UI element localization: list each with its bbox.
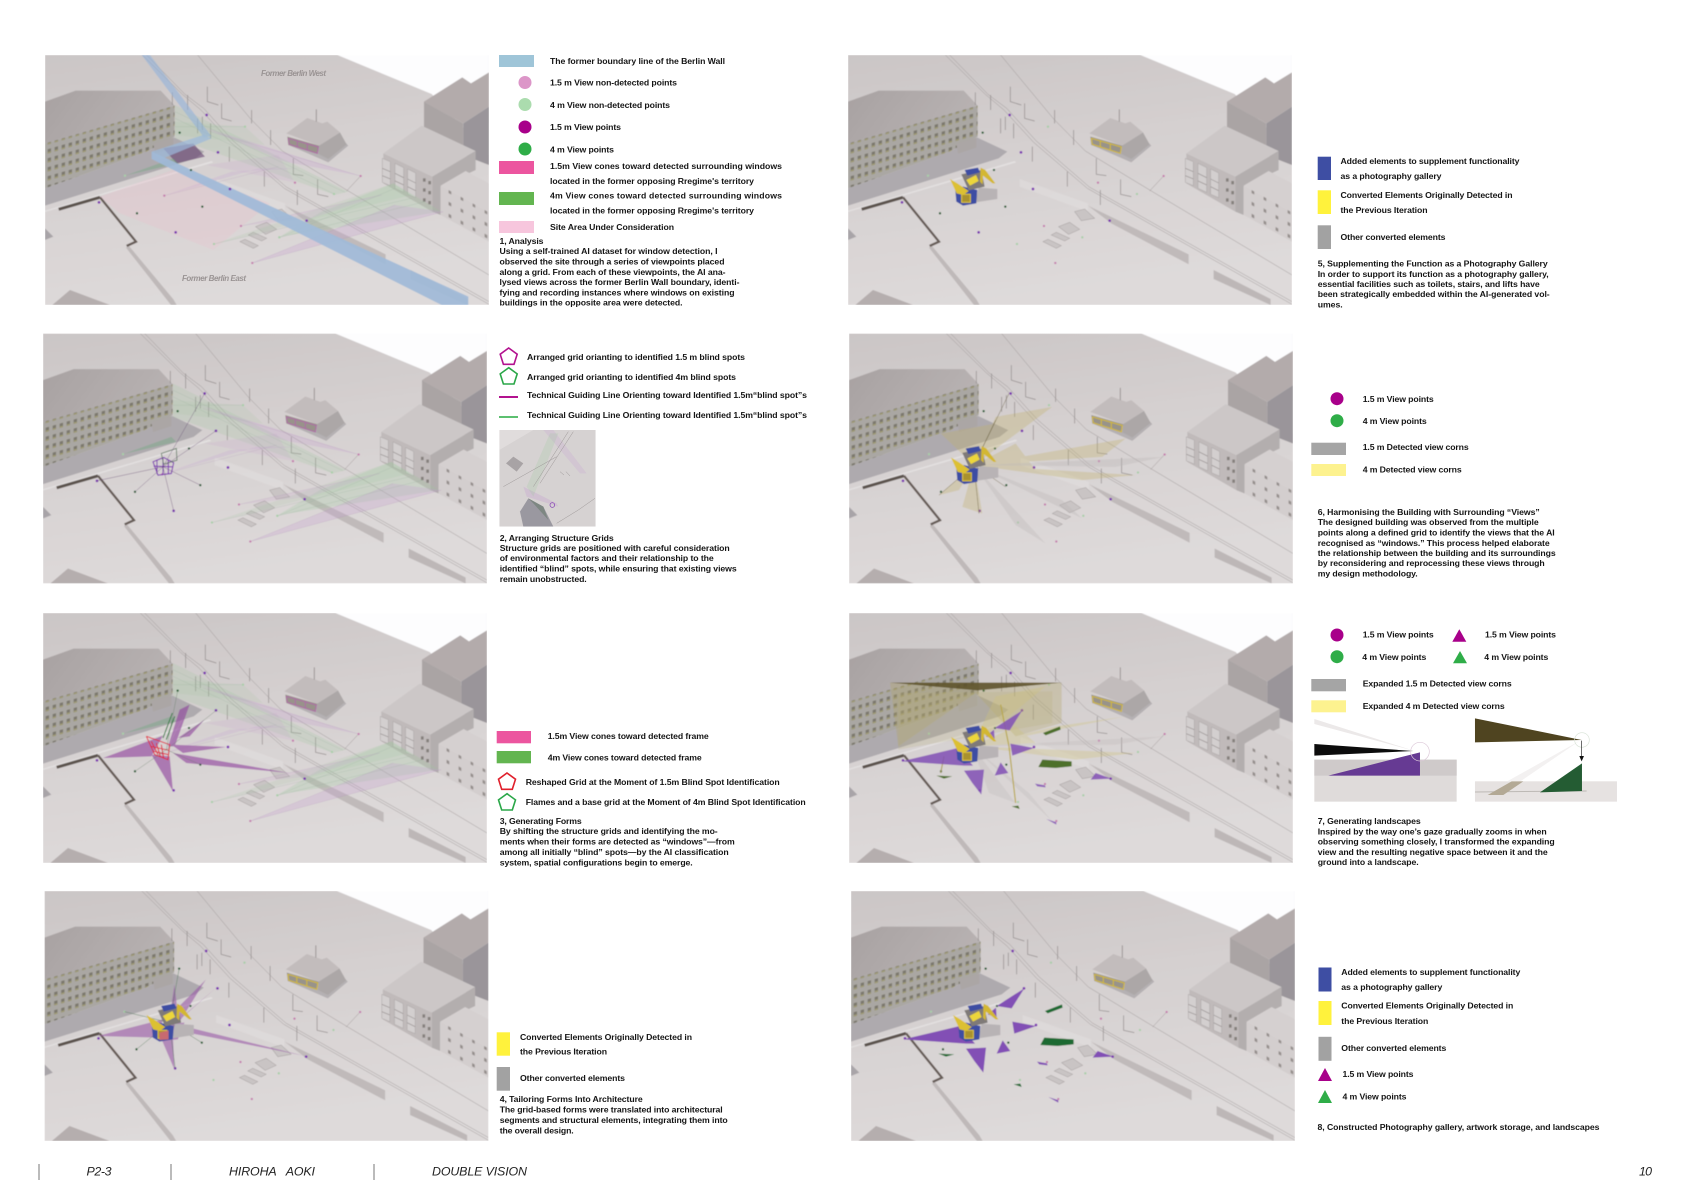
text: 7 generating landscapes description <box>1318 816 1555 867</box>
legend: 6 detected view cones: 4 m Detected view corns <box>1363 464 1462 474</box>
legend: 7 view points and expanded cones: 4 m View points <box>1362 652 1426 662</box>
legend: 1 analysis: 4 m View non-detected points <box>550 100 670 110</box>
text: 2 arranging structure grids description: identified “blind” spots, while ensuring that existing views <box>500 564 737 574</box>
text: 1 analysis description <box>500 236 740 308</box>
legend: 5 functional elements <box>1318 156 1520 249</box>
text: 3 generating forms description <box>500 816 735 868</box>
legend: 8 constructed elements: the Previous Iteration <box>1341 1016 1428 1026</box>
panel: 7 generating landscapes site view <box>849 613 1293 863</box>
legend: 5 functional elements: Other converted elements <box>1340 232 1446 242</box>
text: 3 generating forms description: system, spatial configurations begin to emerge. <box>500 858 693 868</box>
legend: 5 functional elements: the Previous Iteration <box>1340 205 1428 215</box>
text: 6 harmonising description: points along a defined grid to identify the views that the AI <box>1318 528 1555 538</box>
legend: 8 constructed elements <box>1318 967 1520 1103</box>
text: 5 supplementing function description: umes. <box>1318 300 1343 310</box>
footer: HIROHA AOKI <box>229 1164 316 1178</box>
text: 2 arranging structure grids description: remain unobstructed. <box>500 574 587 584</box>
legend: 6 detected view cones: 4 m View points <box>1363 416 1427 426</box>
legend: 7 view points and expanded cones: 1.5 m View points <box>1485 630 1556 640</box>
legend: 4 converted elements: Other converted elements <box>520 1073 625 1083</box>
legend: 8 constructed elements: as a photography gallery <box>1341 982 1442 992</box>
legend: 4 converted elements <box>497 1032 692 1091</box>
panel: 1 analysis site view <box>45 55 489 305</box>
text: 4 tailoring forms description: the overall design. <box>500 1126 574 1136</box>
legend: 1 analysis: located in the former opposing Rregime's territory <box>550 206 754 216</box>
panel: 2 arranging structure grids site view <box>43 334 487 583</box>
text: 4 tailoring forms description: The grid-based forms were translated into architectural <box>500 1104 723 1114</box>
panel: 5 supplementing function site view <box>848 55 1292 305</box>
legend: 6 detected view cones <box>1311 392 1469 476</box>
legend: 8 constructed elements: 4 m View points <box>1342 1092 1407 1102</box>
text: 7 generating landscapes description: observing something closely, I transformed the expanding <box>1318 836 1555 846</box>
text: 6 harmonising description: my design methodology. <box>1318 568 1418 578</box>
legend: 8 constructed elements: Other converted elements <box>1341 1043 1446 1053</box>
text: 3 generating forms description: 3, Generating Forms <box>500 816 582 826</box>
text: 7 generating landscapes description: Inspired by the way one’s gaze gradually zooms in when <box>1318 826 1547 836</box>
panel: 4 tailoring forms site view <box>44 891 488 1141</box>
legend: 1 analysis: 1.5 m View points <box>550 122 621 132</box>
footer: DOUBLE VISION <box>432 1164 527 1178</box>
legend: 2 grids and guiding lines: Technical Guiding Line Orienting toward Identified 1.5m“blind spot”s <box>527 390 807 400</box>
text: 1 analysis description: lysed views across the former Berlin Wall boundary, identi- <box>500 277 740 287</box>
label: former berlin west: Former Berlin West <box>261 69 326 78</box>
legend: 7 view points and expanded cones: Expanded 4 m Detected view corns <box>1363 701 1505 711</box>
legend: 6 detected view cones: 1.5 m View points <box>1363 394 1434 404</box>
legend: 5 functional elements: Converted Elements Originally Detected in <box>1340 190 1512 200</box>
legend: 1 analysis: 1.5 m View non-detected points <box>550 78 677 88</box>
legend: 8 constructed elements: 1.5 m View points <box>1342 1069 1414 1079</box>
text: 2 arranging structure grids description: of environmental factors and their relationship to the <box>500 553 714 563</box>
footer: P2-3 <box>86 1164 112 1178</box>
text: 4 tailoring forms description: 4, Tailoring Forms Into Architecture <box>500 1094 643 1104</box>
text: 6 harmonising description: recognised as “windows.” This process helped elaborate <box>1318 538 1550 548</box>
text: 1 analysis description: observed the site through a series of viewpoints placed <box>500 256 724 266</box>
text: 7 generating landscapes description: 7, Generating landscapes <box>1318 816 1421 826</box>
text: 5 supplementing function description: 5, Supplementing the Function as a Photography Gallery <box>1318 258 1548 268</box>
legend: 1 analysis <box>499 55 782 233</box>
legend: 5 functional elements: as a photography gallery <box>1340 171 1442 181</box>
diagram: landscape section 4 m <box>1475 718 1617 802</box>
text: 6 harmonising description: 6, Harmonising the Building with Surrounding “Views” <box>1318 507 1540 517</box>
legend: 1 analysis: located in the former opposing Rregime's territory <box>550 176 754 186</box>
text: 5 supplementing function description: been strategically embedded within the AI-generated vol- <box>1318 289 1550 299</box>
legend: 3 generating forms: Flames and a base grid at the Moment of 4m Blind Spot Identification <box>526 797 806 807</box>
text: 4 tailoring forms description <box>500 1094 728 1136</box>
legend: 4 converted elements: the Previous Iteration <box>520 1046 607 1056</box>
text: 8 caption: 8, Constructed Photography gallery, artwork storage, and landscapes <box>1318 1122 1600 1132</box>
panel: 3 generating forms site view <box>43 613 487 863</box>
legend: 1 analysis: 4 m View points <box>550 144 614 154</box>
legend: 1 analysis: 4m View cones toward detected surrounding windows <box>550 190 782 200</box>
text: 4 tailoring forms description: segments and structural elements, integrating them into <box>500 1115 728 1125</box>
text: 5 supplementing function description: essential facilities such as toilets, stairs, and lifts have <box>1318 279 1540 289</box>
legend: 7 view points and expanded cones: 4 m View points <box>1484 652 1548 662</box>
text: 5 supplementing function description: In order to support its function as a photography gallery, <box>1318 269 1549 279</box>
text: 6 harmonising description <box>1318 507 1556 578</box>
text: 6 harmonising description: by reconsidering and reprocessing these views through <box>1318 558 1545 568</box>
footer: 10 <box>1639 1164 1652 1178</box>
legend: 8 constructed elements: Converted Elements Originally Detected in <box>1341 1001 1513 1011</box>
legend: 2 grids and guiding lines: Technical Guiding Line Orienting toward Identified 1.5m“blind spot”s <box>527 410 807 420</box>
text: 1 analysis description: fying and recording instances where windows on existing <box>500 288 734 298</box>
legend: 7 view points and expanded cones: Expanded 1.5 m Detected view corns <box>1363 678 1512 688</box>
legend: 2 grids and guiding lines <box>499 348 807 420</box>
legend: 1 analysis: 1.5m View cones toward detected surrounding windows <box>550 161 782 171</box>
legend: 2 grids and guiding lines: Arranged grid orianting to identified 1.5 m blind spots <box>527 352 745 362</box>
legend: 3 generating forms: Reshaped Grid at the Moment of 1.5m Blind Spot Identification <box>526 777 780 787</box>
legend: 4 converted elements: Converted Elements Originally Detected in <box>520 1032 692 1042</box>
legend: 8 constructed elements: Added elements to supplement functionality <box>1341 967 1520 977</box>
text: 1 analysis description: buildings in the opposite area were detected. <box>500 298 682 308</box>
text: 3 generating forms description: By shifting the structure grids and identifying the mo- <box>500 826 718 836</box>
legend: 7 view points and expanded cones: 1.5 m View points <box>1363 630 1434 640</box>
legend: 1 analysis: The former boundary line of the Berlin Wall <box>550 56 725 66</box>
legend: 1 analysis: Site Area Under Consideration <box>550 222 674 232</box>
text: 1 analysis description: 1, Analysis <box>500 236 544 246</box>
label: former berlin east: Former Berlin East <box>182 274 246 283</box>
text: 7 generating landscapes description: view and the resulting negative space between it and the <box>1318 847 1548 857</box>
panel: 6 harmonising views site view <box>849 334 1293 583</box>
legend: 5 functional elements: Added elements to supplement functionality <box>1340 156 1520 166</box>
text: 7 generating landscapes description: ground into a landscape. <box>1318 857 1419 867</box>
text: 3 generating forms description: among all initially “blind” spots—by the AI classification <box>500 847 729 857</box>
footer <box>39 1164 1652 1180</box>
text: 2 arranging structure grids description <box>500 533 737 584</box>
diagram: landscape section 1.5 m <box>1314 719 1457 802</box>
text: 3 generating forms description: ments when their forms are detected as “windows”—from <box>500 836 735 846</box>
text: 1 analysis description: Using a self-trained AI dataset for window detection, I <box>500 246 718 256</box>
legend: 6 detected view cones: 1.5 m Detected view corns <box>1363 442 1469 452</box>
legend: 3 generating forms: 4m View cones toward detected frame <box>548 752 702 762</box>
text: 6 harmonising description: the relationship between the building and its surroundings <box>1318 548 1556 558</box>
text: 1 analysis description: along a grid. From each of these viewpoints, the AI ana- <box>500 267 726 277</box>
text: 2 arranging structure grids description: Structure grids are positioned with careful consideration <box>500 543 730 553</box>
image: plan thumbnail <box>499 430 596 527</box>
text: 6 harmonising description: The designed building was observed from the multiple <box>1318 517 1539 527</box>
legend: 3 generating forms <box>497 731 806 810</box>
legend: 2 grids and guiding lines: Arranged grid orianting to identified 4m blind spots <box>527 372 736 382</box>
panel: 8 constructed gallery site view <box>851 891 1295 1141</box>
legend: 7 view points and expanded cones <box>1311 628 1556 712</box>
text: 2 arranging structure grids description: 2, Arranging Structure Grids <box>500 533 614 543</box>
legend: 3 generating forms: 1.5m View cones toward detected frame <box>548 731 709 741</box>
text: 5 supplementing function description <box>1318 258 1550 310</box>
